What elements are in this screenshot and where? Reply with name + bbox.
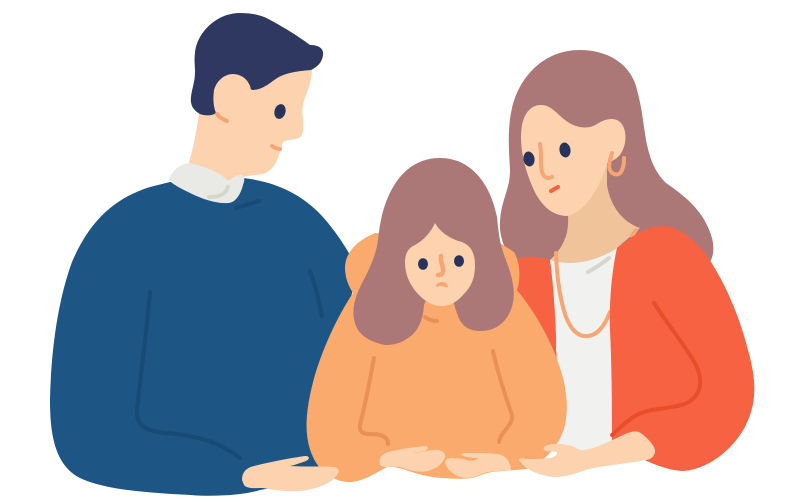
woman figure <box>500 50 754 471</box>
man figure <box>50 13 358 496</box>
sweater right crease <box>310 271 322 316</box>
red jacket right <box>610 226 754 471</box>
girl mouth <box>436 282 448 287</box>
girl's left hand <box>379 446 445 472</box>
woman left eye <box>522 151 536 167</box>
man sweater <box>50 178 358 496</box>
girl nose <box>438 256 443 275</box>
girl figure <box>307 158 567 482</box>
woman right eye <box>558 142 572 158</box>
woman mouth <box>551 187 558 191</box>
girl left eye <box>418 258 428 270</box>
girl face <box>405 223 475 306</box>
jacket sleeve crease <box>612 303 700 435</box>
man's hand <box>242 456 339 491</box>
woman's hand <box>519 431 655 477</box>
necklace <box>556 253 610 336</box>
earring <box>609 153 624 174</box>
man eye <box>273 103 287 120</box>
necklace right end <box>632 230 636 236</box>
white shirt <box>550 248 617 452</box>
man neck and face <box>186 60 312 192</box>
girl left sleeve crease <box>360 358 388 444</box>
neck <box>550 160 640 263</box>
man nose mark <box>272 146 280 149</box>
girl hair <box>353 158 514 345</box>
shirt crease <box>588 258 609 272</box>
girl right eye <box>454 255 464 267</box>
woman face <box>521 105 625 216</box>
woman hair <box>500 50 713 280</box>
man hair <box>191 13 323 115</box>
sweater left crease <box>137 292 240 458</box>
woman nose <box>540 144 552 178</box>
girl's right hand <box>445 453 511 478</box>
girl body and sweater <box>307 233 567 482</box>
sweater collar crease <box>236 201 259 208</box>
collar crease <box>209 187 228 197</box>
shirt collar <box>169 163 244 203</box>
girl right sleeve crease <box>493 351 512 442</box>
girl neck crease <box>425 317 437 321</box>
hands <box>242 431 655 491</box>
jacket left panel <box>510 257 560 380</box>
man ear crease <box>217 114 227 121</box>
